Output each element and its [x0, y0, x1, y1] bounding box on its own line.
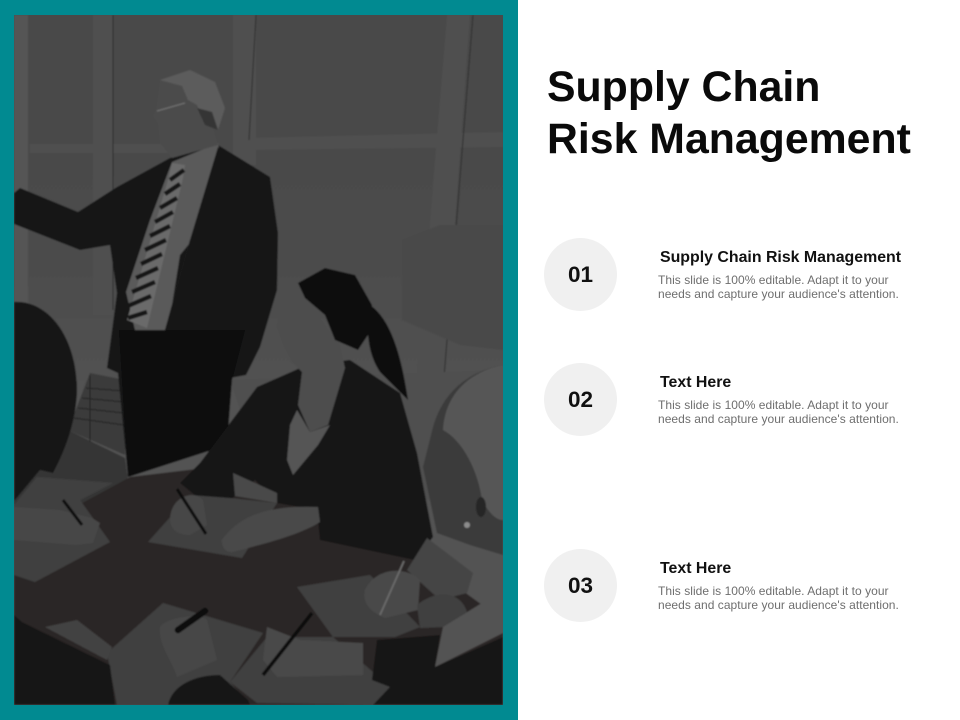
window frames	[14, 16, 28, 278]
item 01 heading: Supply Chain Risk Management	[660, 249, 901, 266]
item 03 heading: Text Here	[660, 560, 731, 577]
item 01	[544, 238, 901, 311]
number badge 03	[544, 549, 617, 622]
lower left figure	[14, 615, 115, 705]
title	[547, 63, 911, 163]
item 02 description: needs and capture your audience's attention.	[658, 412, 899, 426]
title: Risk Management	[547, 115, 911, 163]
item 02 description: This slide is 100% editable. Adapt it to your	[658, 398, 889, 412]
photo: business meeting in dark grayscale	[14, 15, 503, 705]
item 03 description: This slide is 100% editable. Adapt it to your	[658, 584, 889, 598]
number badge 02	[544, 363, 617, 436]
item 03 description: needs and capture your audience's attention.	[658, 598, 899, 612]
item 01 description: This slide is 100% editable. Adapt it to your	[658, 273, 889, 287]
man: neck and face	[172, 144, 218, 158]
item 03	[544, 549, 899, 622]
item 02 description	[658, 398, 899, 426]
item 01 description: needs and capture your audience's attention.	[658, 287, 899, 301]
seated left man head	[14, 302, 77, 500]
item 03 description	[658, 584, 899, 612]
number badge 03: 03	[568, 573, 593, 598]
man: trousers	[119, 330, 245, 477]
papers	[14, 473, 420, 705]
woman: ponytail	[368, 305, 408, 400]
radiator	[68, 373, 125, 455]
woman: hair	[298, 268, 372, 350]
man: lapel	[172, 147, 223, 302]
man: jacket	[14, 145, 278, 477]
lower centre sleeve	[168, 675, 250, 705]
distant city	[447, 226, 457, 338]
right hands and pen	[364, 571, 420, 618]
right blonde woman	[423, 365, 503, 555]
man: hair	[160, 70, 225, 130]
item 02 heading: Text Here	[660, 374, 731, 391]
man: shirt	[126, 143, 222, 330]
woman: blouse	[287, 410, 330, 475]
lower right hand and pen	[263, 627, 363, 677]
lower right figure	[434, 604, 503, 668]
woman: neck and face	[297, 360, 346, 432]
left hand and pen	[75, 516, 100, 526]
woman: jacket	[180, 360, 433, 560]
lower centre hand and pen	[180, 617, 200, 632]
woman's hands and pen	[170, 495, 200, 525]
man: tie	[127, 163, 185, 328]
title: Supply Chain	[547, 63, 820, 111]
item 01 description	[658, 273, 899, 301]
item 02	[544, 363, 899, 436]
floor	[14, 431, 128, 504]
panel: teal photo frame	[0, 0, 518, 720]
right woman's sleeve	[407, 538, 473, 600]
wall below window	[442, 372, 445, 390]
number badge 01: 01	[568, 262, 593, 287]
number badge 01	[544, 238, 617, 311]
number badge 02: 02	[568, 387, 593, 412]
table	[14, 465, 503, 705]
